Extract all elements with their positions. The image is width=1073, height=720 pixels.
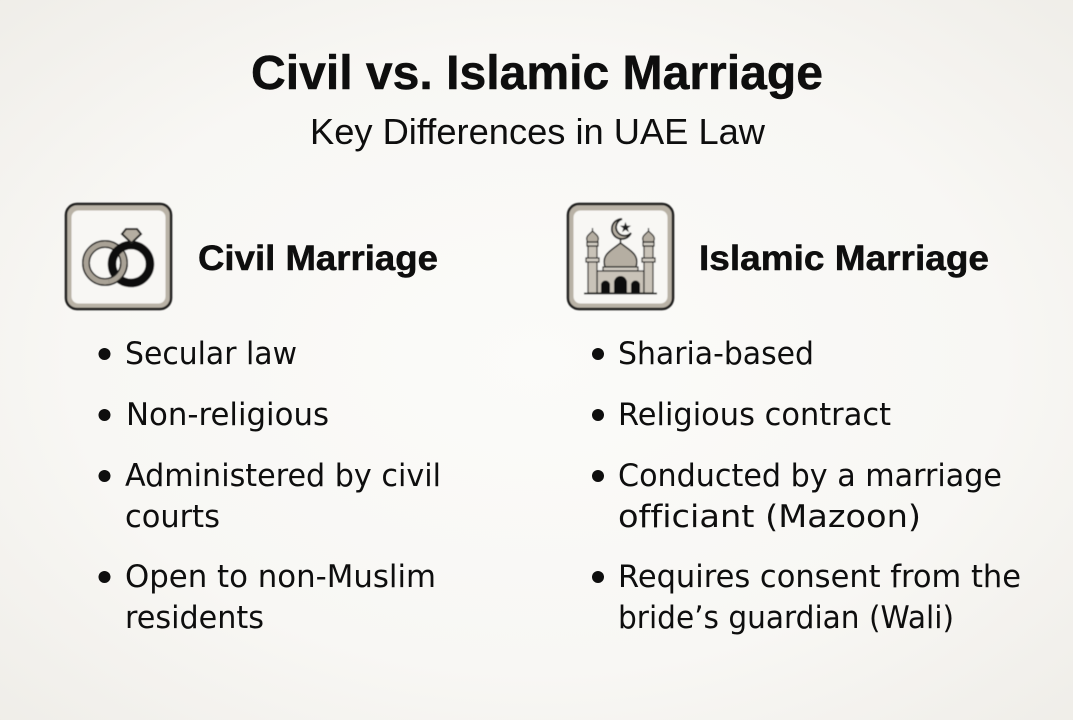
list: civil marriage points: Open to non-Muslim [125, 559, 436, 595]
list: civil marriage points [98, 336, 441, 636]
heading: civil marriage: Civil Marriage [198, 239, 438, 278]
panel: islamic marriage [568, 204, 1021, 636]
list: islamic marriage points: bride’s guardian (Wali) [618, 600, 954, 636]
list: islamic marriage points: Requires consent from the [618, 559, 1021, 595]
icon: wedding rings [66, 204, 171, 309]
list: islamic marriage points: Conducted by a marriage [618, 458, 1002, 494]
list: islamic marriage points [592, 336, 1021, 636]
list: islamic marriage points: Sharia-based [618, 336, 814, 372]
subtitle: Key Differences in UAE Law [310, 111, 766, 152]
list: civil marriage points: Administered by civil [125, 458, 441, 494]
list: civil marriage points: courts [125, 499, 220, 535]
list: civil marriage points: residents [125, 600, 264, 636]
panel: civil marriage [66, 204, 441, 636]
title: Civil vs. Islamic Marriage [251, 47, 823, 100]
list: islamic marriage points: Religious contract [618, 397, 891, 433]
icon: mosque [568, 204, 673, 309]
heading: islamic marriage: Islamic Marriage [699, 239, 989, 278]
list: civil marriage points: Non-religious [126, 397, 329, 433]
list: civil marriage points: Secular law [125, 336, 297, 372]
list: islamic marriage points: officiant (Mazoon) [618, 499, 921, 535]
